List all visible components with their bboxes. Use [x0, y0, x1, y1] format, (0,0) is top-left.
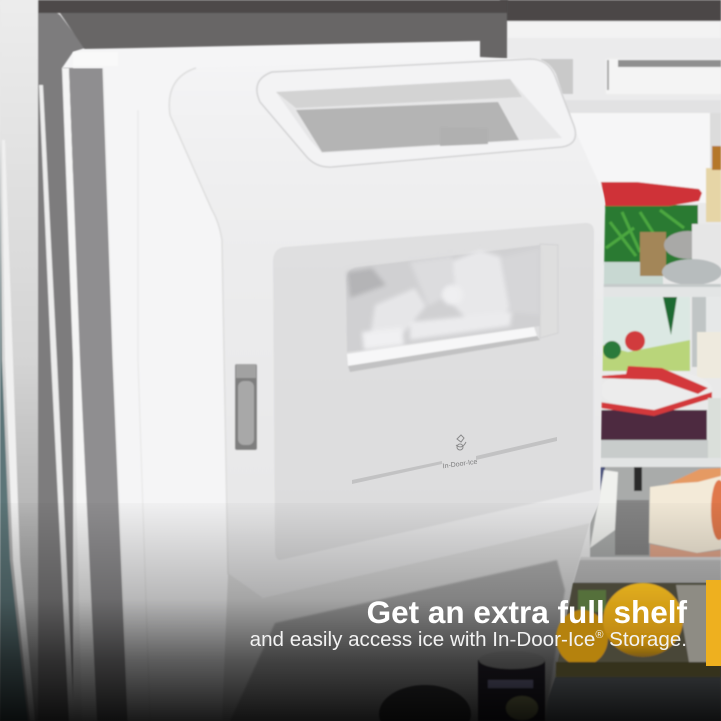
- headline: Get an extra full shelf: [367, 594, 687, 630]
- dark gradient overlay: [0, 503, 721, 721]
- subheading: and easily access ice with In-Door-Ice® Storage.: [250, 628, 687, 651]
- air vent: [606, 59, 721, 94]
- metal tins: [640, 224, 721, 285]
- handle opening: [257, 59, 576, 167]
- middle glass shelf: [598, 458, 721, 467]
- bottle on top shelf: [706, 146, 721, 222]
- stainless steel door edge: [0, 0, 508, 721]
- yellow accent bar: [706, 580, 721, 666]
- front panel: [273, 223, 594, 560]
- refrigerator interior and shelves: [500, 0, 721, 721]
- In-Door-Ice label: In-Door-Ice: [442, 459, 478, 470]
- upper glass shelf: [602, 284, 721, 287]
- lower shelf items: [590, 467, 721, 557]
- printed produce bag: [602, 297, 721, 378]
- crisper bin with lemons: [555, 583, 721, 677]
- ice window: [346, 244, 558, 372]
- cans on bottom shelf: [379, 651, 545, 721]
- green bean container with red lid: [601, 182, 702, 288]
- lower compartment: [222, 523, 590, 721]
- door latch: [235, 364, 257, 450]
- berry container with red lid: [600, 366, 721, 458]
- bin front: [169, 58, 605, 598]
- lower shelf rim: [570, 557, 721, 583]
- icon: ice cubes: [456, 435, 466, 450]
- ice storage bin: [169, 58, 605, 721]
- In-Door-Ice label: [352, 435, 557, 484]
- door liner trim: [62, 41, 600, 721]
